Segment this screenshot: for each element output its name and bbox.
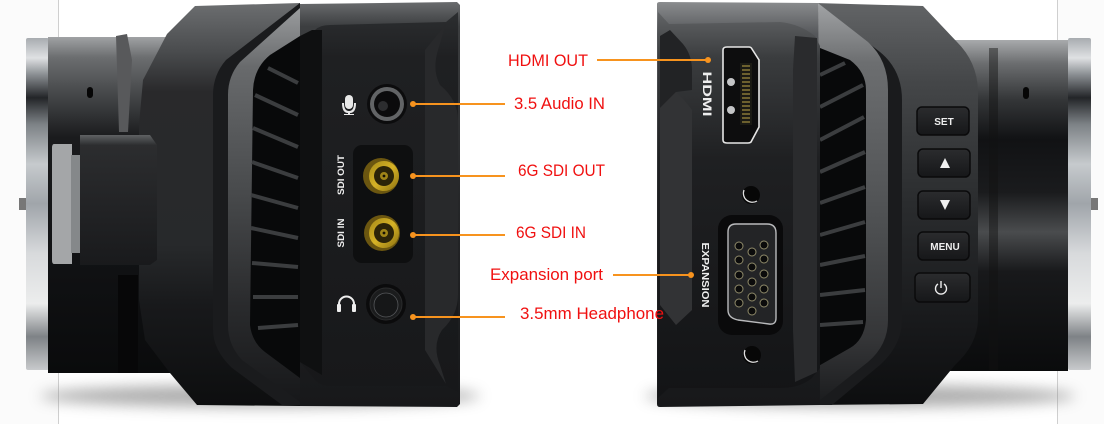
ring pin right (1091, 198, 1098, 210)
body right (815, 3, 978, 405)
vent slats right (820, 63, 865, 325)
callout: 3.5 Audio IN (410, 94, 605, 113)
button: power (915, 273, 970, 302)
port panel right (657, 2, 820, 407)
callout: Expansion port (490, 265, 694, 284)
callout: 6G SDI IN (410, 223, 586, 242)
vent grill left (250, 36, 300, 378)
sdi out connector (363, 158, 399, 194)
lens barrel left (48, 37, 173, 373)
headphone jack (366, 284, 406, 324)
bezel light left (228, 8, 300, 402)
hdmi port (723, 47, 759, 143)
label: SDI OUT: SDI OUT (336, 155, 347, 195)
screw hole bottom (743, 346, 761, 364)
bezel dark right (815, 3, 902, 405)
mount ring left (26, 38, 49, 370)
audio in jack (367, 84, 407, 124)
callout: 6G SDI IN: 6G SDI IN (516, 223, 586, 242)
tab latch black (80, 135, 157, 265)
bezel dark left (213, 3, 300, 405)
mount ring right (1068, 38, 1091, 370)
expansion pins (735, 241, 768, 315)
callout: HDMI OUT: HDMI OUT (508, 51, 588, 70)
vent slats left (251, 68, 298, 328)
left camera (19, 2, 480, 407)
port panel left (300, 2, 460, 407)
callout: Expansion port: Expansion port (490, 265, 603, 284)
barrel slot left (87, 87, 93, 98)
label: EXPANSION: EXPANSION (699, 242, 710, 308)
callout: 6G SDI OUT: 6G SDI OUT (518, 161, 605, 180)
button: SET: SET (934, 117, 954, 128)
callout: 6G SDI OUT (410, 161, 605, 180)
barrel slot right (1023, 87, 1029, 99)
icon: microphone (342, 95, 356, 115)
button: MENU: MENU (930, 242, 960, 253)
floor shadow right (645, 385, 1075, 407)
label: HDMI: HDMI (700, 72, 714, 116)
body left (139, 3, 300, 406)
button: MENU (918, 232, 969, 260)
ring pin left (19, 198, 26, 210)
label: SDI IN: SDI IN (336, 218, 347, 248)
button: up (918, 149, 970, 177)
sdi in connector (364, 215, 400, 251)
button: SET (917, 107, 969, 135)
vent grill right (815, 46, 866, 368)
sdi connector well (353, 145, 413, 263)
lens barrel right (950, 40, 1068, 371)
right camera (645, 2, 1098, 407)
floor shadow left (40, 385, 480, 407)
screw hole top (742, 186, 760, 204)
expansion port (718, 215, 783, 335)
callout: 3.5 Audio IN: 3.5 Audio IN (514, 94, 605, 113)
icon: headphones (337, 297, 356, 312)
callout: 3.5mm Headphone: 3.5mm Headphone (520, 304, 664, 323)
tab latch silver (52, 144, 72, 264)
button: down (918, 191, 970, 219)
callout: HDMI OUT (508, 51, 711, 70)
bezel light right (818, 3, 888, 400)
callout: 3.5mm Headphone (410, 304, 664, 323)
